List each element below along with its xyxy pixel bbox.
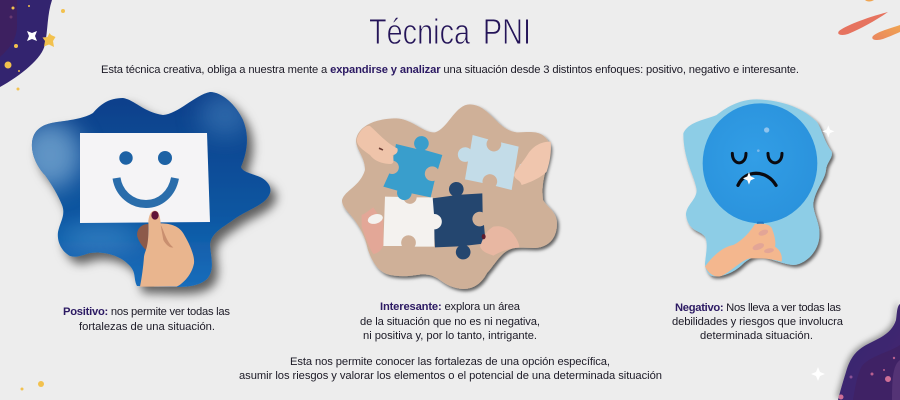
- navy puzzle piece: [432, 182, 486, 259]
- panel: positivo image: [18, 92, 270, 287]
- caption: interesante: [360, 301, 540, 342]
- closing text: [239, 356, 662, 382]
- sky blob: [32, 92, 270, 287]
- caption: negativo: debilidades y riesgos que involucra: [672, 316, 844, 328]
- caption: positivo: [63, 306, 230, 333]
- decoration: top-left purple blob: [0, 0, 65, 90]
- caption: interesante: Interesante: explora un área: [380, 301, 521, 313]
- intro text: Esta técnica creativa, obliga a nuestra mente a expandirse y analizar una situación desde 3 distintos enfoques: positivo, negativo e interesante.: [101, 64, 799, 76]
- closing text: Esta nos permite conocer las fortalezas de una opción específica,: [290, 356, 610, 368]
- caption: negativo: [672, 302, 844, 342]
- paper with smile: [80, 133, 210, 223]
- balloon with sad face: [703, 103, 817, 227]
- decoration: small stars bottom-left: [20, 381, 44, 390]
- sky highlights: [18, 93, 251, 252]
- panel: interesante image: [342, 104, 557, 289]
- tan blob: [342, 104, 557, 289]
- blue puzzle piece: [383, 136, 442, 200]
- hand holding paper: [137, 211, 194, 287]
- hands: [357, 126, 551, 256]
- light blue blob: [683, 99, 832, 276]
- decoration: bottom-right purple blob: [811, 304, 900, 400]
- white puzzle piece: [383, 197, 442, 247]
- caption: negativo: determinada situación.: [700, 330, 813, 342]
- sparkle: [822, 125, 834, 137]
- panel: negativo image: [683, 99, 834, 277]
- caption: positivo: fortalezas de una situación.: [79, 321, 215, 333]
- light blue puzzle piece: [458, 135, 519, 190]
- caption: interesante: ni positiva y, por lo tanto, intrigante.: [363, 330, 537, 342]
- decoration: top-right orange strokes: [838, 0, 900, 40]
- caption: interesante: de la situación que no es ni negativa,: [360, 316, 540, 328]
- title: Técnica PNI: [369, 11, 531, 52]
- caption: negativo: Negativo: Nos lleva a ver todas las: [675, 302, 841, 314]
- closing text: asumir los riesgos y valorar los elementos o el potencial de una determinada situación: [239, 370, 662, 382]
- hand holding balloon: [705, 224, 782, 277]
- caption: positivo: Positivo: nos permite ver todas las: [63, 306, 230, 318]
